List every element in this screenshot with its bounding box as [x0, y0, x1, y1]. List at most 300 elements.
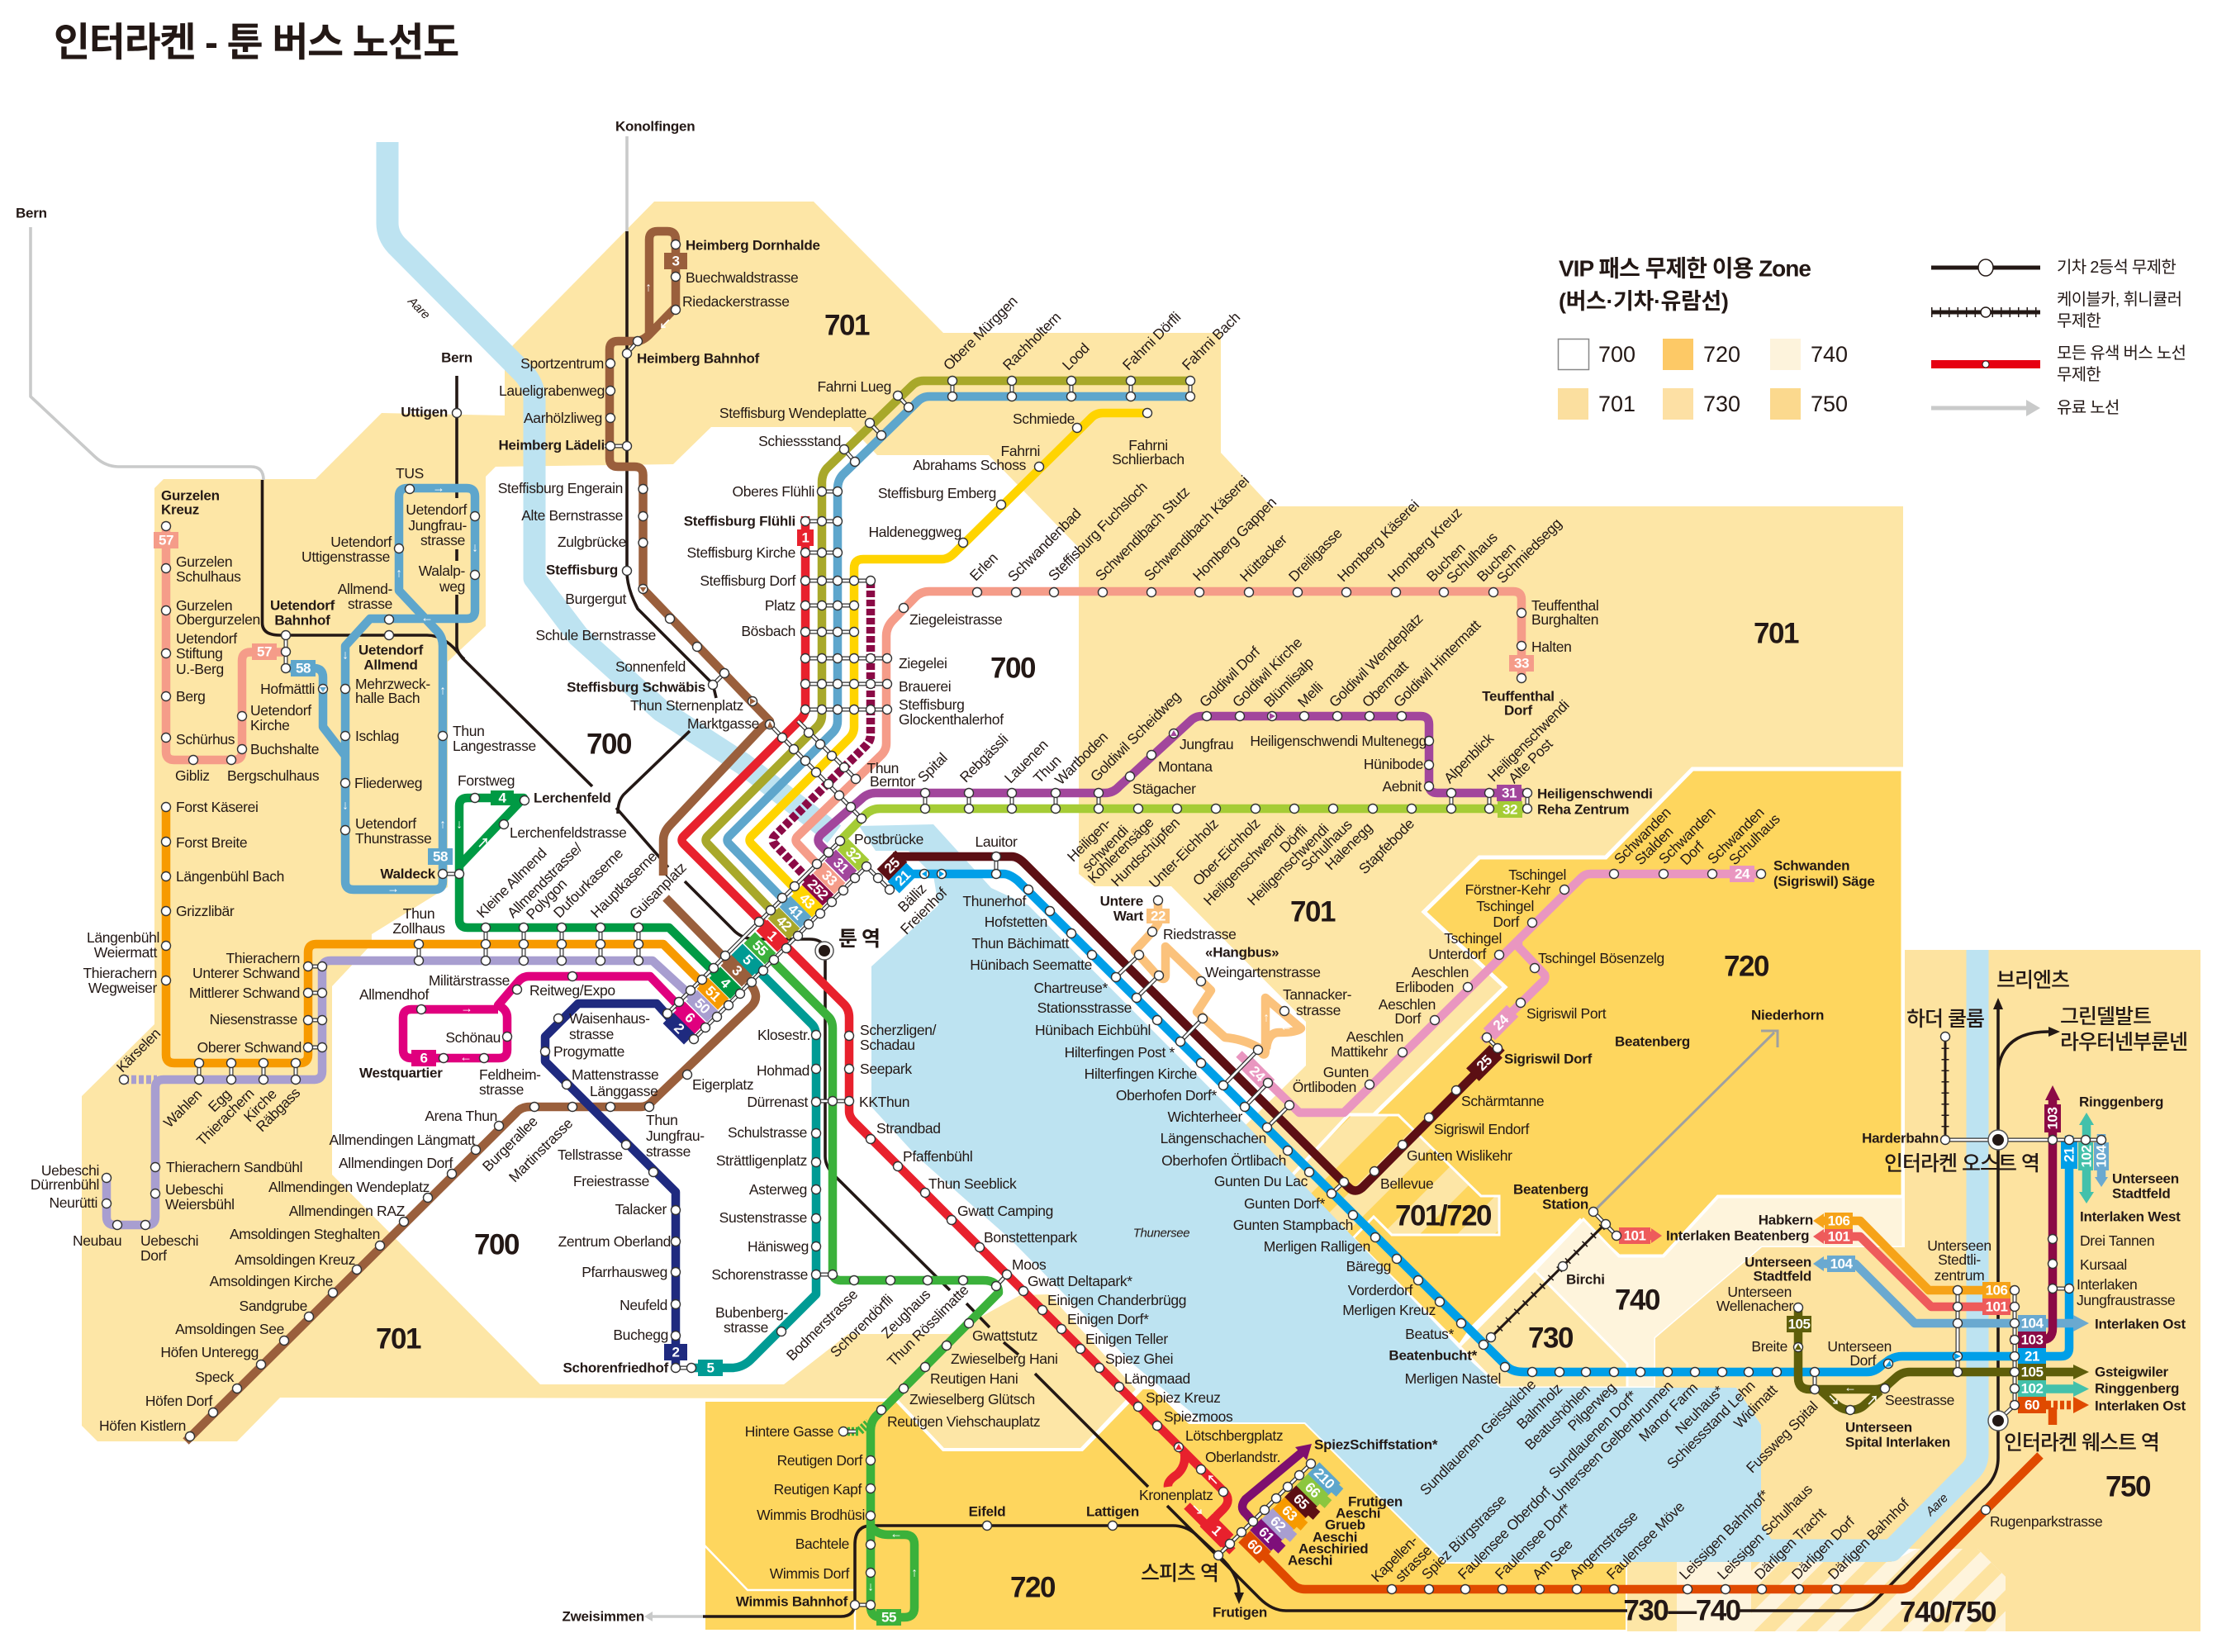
right aligned stop labels: Wegweiser	[88, 980, 158, 996]
left aligned stop labels: strasse	[569, 1026, 614, 1042]
olive triangle marker	[1795, 1344, 1802, 1350]
rotated stop labels: Zeughaus	[878, 1285, 934, 1341]
Korean place names: 브리엔츠	[1996, 969, 2069, 992]
right aligned stop labels: Amsoldingen Kirche	[210, 1273, 333, 1289]
Spiez destination tails	[1266, 1479, 1340, 1550]
legend line labels: 기차 2등석 무제한	[2057, 258, 2176, 277]
rotated stop labels: Halenegg	[1322, 819, 1375, 873]
left aligned stop labels: Interlaken	[2077, 1276, 2137, 1293]
rotated stop labels: Buchen	[1474, 539, 1519, 585]
left aligned stop labels: Reutigen Viehschauplatz	[887, 1413, 1040, 1430]
direction arrows on lines: ←	[421, 611, 433, 624]
rail Uttigen	[457, 376, 464, 659]
line 1	[682, 516, 1232, 1551]
left aligned stop labels: Schulhaus	[176, 568, 241, 585]
hub badge 43	[791, 885, 823, 917]
zone 740/750 hatch	[1751, 1549, 2006, 1631]
right aligned stop labels: Aeschlen	[1412, 964, 1469, 980]
Spiez Schiffstation arrowhead	[1295, 1444, 1312, 1460]
right aligned stop labels: Wimmis Dorf	[770, 1565, 849, 1582]
right aligned stop labels: Uebeschi	[41, 1162, 99, 1179]
line 3	[186, 231, 770, 1441]
paid stub Konolfingen	[625, 136, 629, 231]
zone numbers	[376, 309, 2151, 1629]
rotated stop labels: Polygon	[523, 876, 570, 923]
right aligned stop labels: Heiligenschwendi Multenegg	[1250, 733, 1427, 749]
badge 5: 5	[707, 1360, 714, 1376]
right aligned stop labels: Zentrum Oberland	[558, 1233, 671, 1250]
left aligned stop labels: Schärmtanne	[1461, 1093, 1544, 1109]
badge 55	[876, 1609, 901, 1626]
Interlaken Ost station	[1988, 1130, 2008, 1150]
bold stop labels centred: Lattigen	[1086, 1503, 1139, 1520]
left aligned stop labels: Obergurzelen	[176, 611, 260, 628]
right aligned stop labels: Dürrenast	[747, 1094, 808, 1110]
right aligned stop labels: Steffisburg Emberg	[878, 485, 996, 501]
left aligned stop labels: U.-Berg	[176, 661, 224, 677]
left aligned stop labels: Teuffenthal	[1531, 597, 1598, 614]
left aligned stop labels: Kirche	[250, 717, 290, 733]
line 33	[796, 591, 1522, 877]
right aligned stop labels: Hilterfingen Post *	[1065, 1044, 1175, 1061]
right aligned stop labels: Aebnit	[1382, 778, 1422, 795]
hub badge 2	[663, 1013, 695, 1044]
Interlaken West station	[1988, 1411, 2008, 1431]
right aligned stop labels: Buchegg	[613, 1327, 668, 1343]
hub badge 252	[802, 874, 833, 905]
right aligned stop labels: Stationsstrasse	[1037, 999, 1132, 1016]
bold stop labels left aligned: Unterseen	[1845, 1419, 1912, 1436]
right aligned stop labels: Uetendorf	[330, 534, 392, 550]
Thun station	[815, 942, 833, 960]
rotated stop labels: Erlen	[966, 549, 1001, 584]
right aligned stop labels: Reutigen Dorf	[777, 1452, 862, 1469]
route 61 tail	[1266, 1535, 1282, 1550]
legend swatch labels: 730	[1703, 392, 1740, 416]
left aligned stop labels: Schadau	[860, 1037, 915, 1053]
right aligned stop labels	[31, 355, 1892, 1582]
badge 62 Spiez: 62	[1267, 1513, 1289, 1535]
right aligned stop labels: Oberhofen Dorf*	[1116, 1087, 1218, 1104]
rotated stop labels: Leissigen Schulhaus	[1714, 1481, 1816, 1583]
bold stop labels right aligned: Wart	[1113, 909, 1144, 923]
zone 720 main	[1291, 769, 1903, 1346]
zone 740 south	[1677, 1562, 1751, 1631]
hub badge 42: 42	[773, 913, 795, 934]
right aligned stop labels: Haldeneggweg	[868, 524, 961, 540]
legend: line types	[1931, 258, 2186, 417]
route 63 tail	[1289, 1513, 1304, 1526]
badge 4: 4	[499, 790, 507, 806]
right aligned stop labels: Mattikehr	[1331, 1043, 1389, 1060]
left aligned stop labels: Riedackerstrasse	[682, 293, 790, 310]
badge 1 Spiez	[1199, 1513, 1234, 1548]
bold stop labels centred	[270, 350, 1555, 1621]
bold stop labels left aligned: Ringgenberg	[2079, 1094, 2163, 1110]
line 105	[1798, 1308, 2073, 1389]
rotated stop labels: Heiligenschwendi	[1244, 821, 1332, 909]
badge 65 Spiez: 65	[1290, 1491, 1312, 1512]
zone numbers: 720	[1010, 1571, 1056, 1604]
right aligned stop labels: Berntor	[870, 773, 916, 790]
bold stop labels left aligned: Ringgenberg	[2095, 1381, 2179, 1396]
hub badge 33: 33	[819, 867, 840, 889]
direction arrows on lines: ↑	[1263, 1011, 1270, 1024]
direction arrows on lines: ↓	[867, 1579, 874, 1594]
bold stop labels centred: Uetendorf	[270, 598, 335, 613]
left aligned stop labels: Einigen Teller	[1085, 1331, 1168, 1347]
right aligned stop labels: Unterseen	[1727, 1284, 1792, 1300]
badge 104: 104	[1830, 1256, 1853, 1272]
right aligned stop labels: Schorenstrasse	[711, 1266, 808, 1283]
left aligned stop labels: Kursaal	[2080, 1256, 2127, 1273]
right aligned stop labels: Tschingel	[1444, 930, 1502, 947]
right aligned stop labels: Längenschachen	[1161, 1130, 1266, 1146]
bold stop labels left aligned: (Sigriswil) Säge	[1773, 874, 1875, 889]
bold stop labels left aligned: Schwanden	[1773, 857, 1849, 874]
east arrowheads	[2073, 1365, 2089, 1379]
right aligned stop labels: Freiestrasse	[573, 1173, 649, 1189]
line 2	[545, 1004, 679, 1368]
direction arrows on lines: ↘	[1191, 1503, 1204, 1518]
left aligned stop labels: Sigriswil Endorf	[1434, 1121, 1529, 1137]
bold stop labels right aligned: Schorenfriedhof	[563, 1360, 669, 1376]
right aligned stop labels: Thierachern	[83, 965, 157, 981]
hub badge 42	[768, 908, 800, 939]
zone numbers: 700	[586, 729, 632, 760]
right aligned stop labels: Jungfrau-	[408, 517, 468, 534]
left aligned stop labels: Bonstettenpark	[984, 1229, 1077, 1246]
zone 701 east	[1079, 506, 1903, 1177]
bold stop labels left aligned: Birchi	[1566, 1272, 1605, 1287]
rotated stop labels: Sundlauenen Geisskilche	[1417, 1376, 1539, 1498]
102 arrowhead	[2073, 1113, 2094, 1397]
rotated stop labels: Rebgässli	[957, 731, 1011, 786]
right aligned stop labels: Amsoldingen Kreuz	[235, 1251, 355, 1268]
Niederhorn paid cable	[1593, 1031, 1778, 1212]
right aligned stop labels: Allmendingen Wendeplatz	[268, 1179, 430, 1195]
zone 730	[1460, 1270, 1627, 1388]
hub badge 1: 1	[764, 928, 781, 944]
left aligned stop labels: Montana	[1158, 758, 1213, 775]
right aligned stop labels: Thunerhof	[962, 893, 1026, 909]
left aligned stop labels: Buchshalte	[250, 741, 319, 757]
centred stop labels	[392, 437, 1992, 1284]
line 60	[1250, 1455, 2040, 1589]
right aligned stop labels: Aarhölzliweg	[524, 410, 602, 426]
brown triangle markers	[639, 587, 773, 728]
badge 58 Waldeck	[428, 848, 453, 865]
rotated stop labels: Schwandenbad	[1004, 506, 1084, 585]
rotated stop labels: Goldiwil Dorf	[1196, 643, 1263, 710]
badge 1: 1	[802, 530, 809, 545]
line 6	[403, 976, 690, 1058]
right aligned stop labels: Wellenacher	[1716, 1298, 1794, 1314]
right aligned stop labels: Gunten Du Lac	[1214, 1173, 1308, 1189]
badge 31	[1497, 785, 1522, 801]
rotated stop labels: Obere Mürggen	[940, 292, 1021, 373]
left aligned stop labels: Schürhus	[176, 731, 235, 748]
hub badge 31	[825, 850, 857, 881]
badge 32	[1498, 801, 1522, 818]
right aligned stop labels: Sportzentrum	[520, 355, 604, 372]
rotated stop labels: Dörfli	[1276, 822, 1310, 856]
Korean place names: 인터라켄 웨스트 역	[2004, 1431, 2159, 1455]
badge 210 Spiez: 210	[1311, 1465, 1337, 1492]
bold stop labels left aligned: Stadtfeld	[2112, 1186, 2170, 1201]
rotated stop labels: Thun	[1030, 752, 1064, 786]
zone numbers: 701	[1754, 618, 1799, 649]
rotated stop labels: Dorf	[1677, 838, 1707, 868]
legend line labels	[2057, 258, 2186, 417]
right aligned stop labels: Speck	[195, 1369, 235, 1385]
rotated stop labels: Kleine Allmend	[473, 845, 549, 921]
bold stop labels left aligned: Interlaken Beatenberg	[1666, 1227, 1809, 1244]
right aligned stop labels: Höfen Dorf	[145, 1393, 212, 1409]
bold stop labels left aligned: Aeschi	[1336, 1505, 1380, 1521]
badge 60 Spiez: 60	[1244, 1536, 1265, 1558]
badge 104 vertical: 104	[2093, 1145, 2110, 1167]
bold stop labels left aligned: Gsteigwiler	[2095, 1365, 2169, 1379]
badge 31: 31	[1502, 785, 1517, 801]
bold stop labels left aligned: Spital Interlaken	[1845, 1434, 1950, 1450]
rotated stop labels: Unter-Eichholz	[1146, 815, 1222, 891]
line 101 Beatenberg	[1616, 1232, 1652, 1240]
rotated stop labels: Spital	[914, 749, 951, 786]
right aligned stop labels: Uetendorf	[406, 501, 467, 518]
rotated stop labels: Spiez Bürgstrasse	[1418, 1492, 1509, 1583]
left aligned stop labels: Postbrücke	[854, 831, 923, 847]
right aligned stop labels: Allmendingen Längmatt	[329, 1132, 475, 1148]
rotated stop labels: Schwendibach Stutz	[1092, 483, 1193, 584]
right aligned stop labels: Zulgbrücke	[558, 534, 626, 550]
rotated stop labels: Beatushöhlen	[1522, 1381, 1593, 1453]
rotated stop labels: Homberg Gappen	[1189, 494, 1279, 584]
centred stop labels: Fahrni	[1128, 437, 1168, 453]
hub badge 252: 252	[805, 876, 831, 903]
rotated stop labels: Ober-Eichholz	[1189, 815, 1263, 889]
rotated stop labels: Widimatt	[1730, 1381, 1781, 1431]
badge 24 left: 24	[1246, 1063, 1269, 1085]
connector outlines	[199, 341, 2101, 1605]
legend line labels: 모든 유색 버스 노선	[2057, 344, 2186, 363]
right aligned stop labels: Erliboden	[1395, 979, 1454, 995]
rotated stop labels: Melli	[1294, 679, 1326, 710]
right aligned stop labels: Unterseen	[1827, 1338, 1892, 1355]
rotated stop labels: Bodmerstrasse	[783, 1286, 861, 1364]
right aligned stop labels: Schiessstand	[758, 433, 841, 449]
right aligned stop labels: Pfarrhausweg	[582, 1264, 667, 1280]
line 21	[907, 874, 2069, 1372]
left aligned stop labels: Gunten Wislikehr	[1407, 1147, 1512, 1164]
hub badge 5	[732, 944, 763, 976]
rotated stop labels: Blümlisalp	[1260, 654, 1317, 710]
left aligned stop labels: Thun	[646, 1112, 677, 1128]
legend line labels: 유료 노선	[2057, 398, 2120, 417]
badge 105 east: 105	[2021, 1365, 2043, 1379]
right aligned stop labels: Längenbühl	[87, 929, 159, 946]
left aligned stop labels: Fliederweg	[354, 775, 422, 791]
direction arrows on lines: ↘	[1827, 1394, 1840, 1408]
rotated stop labels: Hüttacker	[1237, 531, 1290, 585]
right aligned stop labels: Burgergut	[565, 591, 626, 607]
rotated stop labels: Dufourkaserne	[550, 845, 626, 921]
route 65 tail	[1301, 1502, 1317, 1516]
rotated stop labels: Schulhaus	[1443, 529, 1501, 586]
rotated stop labels: Goldiwil Kirche	[1229, 634, 1305, 710]
legend title: (버스·기차·유람선)	[1559, 289, 1728, 314]
legend line labels: 케이블카, 휘니큘러	[2057, 290, 2181, 309]
Beatenberg funicular ticks	[1491, 1224, 1605, 1337]
centred stop labels: Schlierbach	[1112, 451, 1184, 468]
rotated stop labels: Schwanden	[1655, 804, 1719, 867]
line 51	[166, 807, 713, 1063]
badge 24: 24	[1735, 866, 1750, 882]
right aligned stop labels: Bachtele	[795, 1536, 849, 1552]
left aligned stop labels: Kronenplatz	[1139, 1487, 1213, 1503]
right aligned stop labels: Hilterfingen Kirche	[1085, 1066, 1197, 1082]
blue triangle markers	[320, 687, 326, 692]
bold stop labels left aligned: Aeschi	[1313, 1530, 1357, 1545]
badge 57 north	[154, 532, 178, 548]
bold stop labels left aligned: Frutigen	[1348, 1493, 1403, 1510]
left aligned stop labels: Dorf	[140, 1247, 167, 1264]
rotated stop labels: strasse	[1392, 1542, 1435, 1585]
zone numbers: 730—740	[1623, 1594, 1741, 1627]
line 105 loop	[1821, 1391, 1880, 1410]
right aligned stop labels: Unterer Schwand	[192, 965, 300, 981]
left aligned stop labels: Spiez Kreuz	[1146, 1389, 1221, 1406]
left aligned stop labels: Forstweg	[458, 772, 515, 789]
right aligned stop labels: strasse	[348, 596, 392, 612]
right aligned stop labels: Hünibach Eichbühl	[1035, 1022, 1151, 1038]
centred stop labels: Unterseen	[1927, 1237, 1992, 1254]
line 57	[166, 522, 286, 760]
left aligned stop labels: Uebeschi	[140, 1232, 198, 1249]
zone numbers: 701	[824, 309, 870, 342]
left aligned stop labels: Thun Seeblick	[928, 1175, 1017, 1192]
right aligned stop labels: Bubenberg-	[715, 1304, 789, 1321]
hub badge 33	[814, 862, 845, 894]
paid line Zweisimmen	[653, 1615, 703, 1618]
right aligned stop labels: Steffisburg Wendeplatte	[719, 405, 866, 421]
direction arrows on lines	[342, 281, 1879, 1594]
right aligned stop labels: Tschingel	[1508, 866, 1566, 883]
Korean place names: 스피츠 역	[1141, 1562, 1218, 1585]
left aligned stop labels: Berg	[176, 688, 206, 705]
rotated stop labels: Faulensee Oberdorf	[1455, 1483, 1554, 1583]
stops	[102, 240, 2106, 1609]
direction arrows on lines: ↑	[396, 567, 402, 580]
legend swatch labels: 750	[1811, 392, 1848, 416]
Korean place names: 라우터넨부룬넨	[2060, 1031, 2187, 1054]
hub badge 32	[838, 839, 869, 871]
rotated stop labels: Homberg Käserei	[1334, 496, 1422, 585]
101 arrowheads	[1651, 1228, 1824, 1244]
right aligned stop labels: Merligen Ralligen	[1264, 1238, 1370, 1255]
badge 21 vertical	[2061, 1141, 2077, 1169]
direction arrows on lines: ↑	[645, 281, 652, 294]
left aligned stop labels: Buechwaldstrasse	[686, 269, 798, 286]
badge 61 Spiez	[1250, 1518, 1283, 1551]
left aligned stop labels: Jungfrau-	[646, 1127, 705, 1144]
right aligned stop labels: Steffisburg Engerain	[498, 480, 623, 496]
rail Spiez to Frutigen	[1218, 1555, 1239, 1594]
right aligned stop labels: Klosestr.	[757, 1027, 810, 1043]
badge 24	[1730, 866, 1754, 882]
rail arrowheads	[1234, 998, 2060, 1604]
rotated stop labels: Schiessstand Lehn	[1664, 1378, 1758, 1472]
rotated stop labels: Alpenblick	[1441, 730, 1497, 786]
right aligned stop labels: Steffisburg Kirche	[686, 544, 795, 561]
zone numbers: 720	[1724, 950, 1769, 983]
legend swatch labels: 700	[1598, 342, 1635, 367]
bold stop labels left aligned: Reha Zentrum	[1537, 801, 1629, 818]
Korean place names	[838, 928, 2187, 1585]
light blue triangle markers	[922, 871, 1961, 1367]
legend swatch labels	[1598, 342, 1848, 416]
badge 58 Waldeck: 58	[433, 849, 448, 864]
right aligned stop labels: Thun	[867, 760, 899, 776]
legend title	[1559, 256, 1811, 314]
badge 104 east: 104	[2021, 1315, 2044, 1332]
direction arrows on lines: ↗	[477, 836, 490, 851]
legend title: VIP 패스 무제한 이용 Zone	[1559, 256, 1811, 281]
badge 6	[411, 1050, 436, 1066]
rotated stop labels: Faulensee Dorf*	[1492, 1500, 1574, 1583]
rotated stop labels: Kohlerensäge	[1085, 814, 1156, 886]
left aligned stop labels: Strandbad	[876, 1120, 941, 1137]
rotated stop labels: Stalden	[1631, 824, 1676, 868]
rotated stop labels: Fussweg Spital	[1743, 1398, 1821, 1476]
bold stop labels centred: Bahnhof	[274, 613, 330, 628]
bold stop labels left aligned: Bern	[16, 205, 47, 221]
centred stop labels: zentrum	[1935, 1267, 1984, 1284]
badge 63 Spiez: 63	[1279, 1502, 1300, 1524]
major stations	[815, 942, 2008, 1431]
left aligned stop labels: Brauerei	[899, 678, 951, 695]
rotated stop labels: schwendi	[1079, 822, 1132, 875]
left aligned stop labels: Forst Käserei	[176, 799, 259, 815]
left aligned stop labels: Spiez Ghei	[1105, 1351, 1173, 1367]
right aligned stop labels: Oberer Schwand	[197, 1039, 301, 1056]
legend paid line sample	[1931, 400, 2040, 416]
right aligned stop labels: Unterdorf	[1428, 946, 1486, 962]
bold stop labels right aligned: Harderbahn	[1862, 1130, 1939, 1146]
badge 57	[252, 643, 277, 660]
hub badge 2: 2	[671, 1020, 687, 1037]
badge 101 east: 101	[1986, 1298, 2007, 1315]
badge 102 east: 102	[2021, 1381, 2043, 1396]
right aligned stop labels: Arena Thun	[425, 1108, 497, 1124]
bold stop labels right aligned: Waldeck	[380, 866, 436, 882]
left aligned stop labels: Seestrasse	[1885, 1392, 1954, 1408]
line 60 Interlaken dashed	[2047, 1401, 2075, 1409]
left aligned stop labels: Jungfrau	[1180, 736, 1233, 752]
left aligned stop labels: Mehrzweck-	[355, 676, 430, 692]
rotated stop labels: Alte Post	[1505, 735, 1556, 786]
badge 21 vertical: 21	[2062, 1147, 2077, 1162]
line 4	[459, 798, 725, 983]
bold stop labels left aligned: Aeschi	[1288, 1553, 1332, 1568]
rotated stop labels: Därligen Tracht	[1751, 1504, 1830, 1583]
right aligned stop labels: Gunten	[1323, 1064, 1369, 1080]
left aligned stop labels: Bergschulhaus	[227, 767, 320, 784]
left aligned stop labels: Lerchenfeldstrasse	[510, 824, 627, 841]
rotated stop labels: Martinstrasse	[506, 1115, 576, 1185]
left aligned stop labels	[73, 269, 2175, 1530]
rail Bern to Thun	[263, 480, 824, 951]
